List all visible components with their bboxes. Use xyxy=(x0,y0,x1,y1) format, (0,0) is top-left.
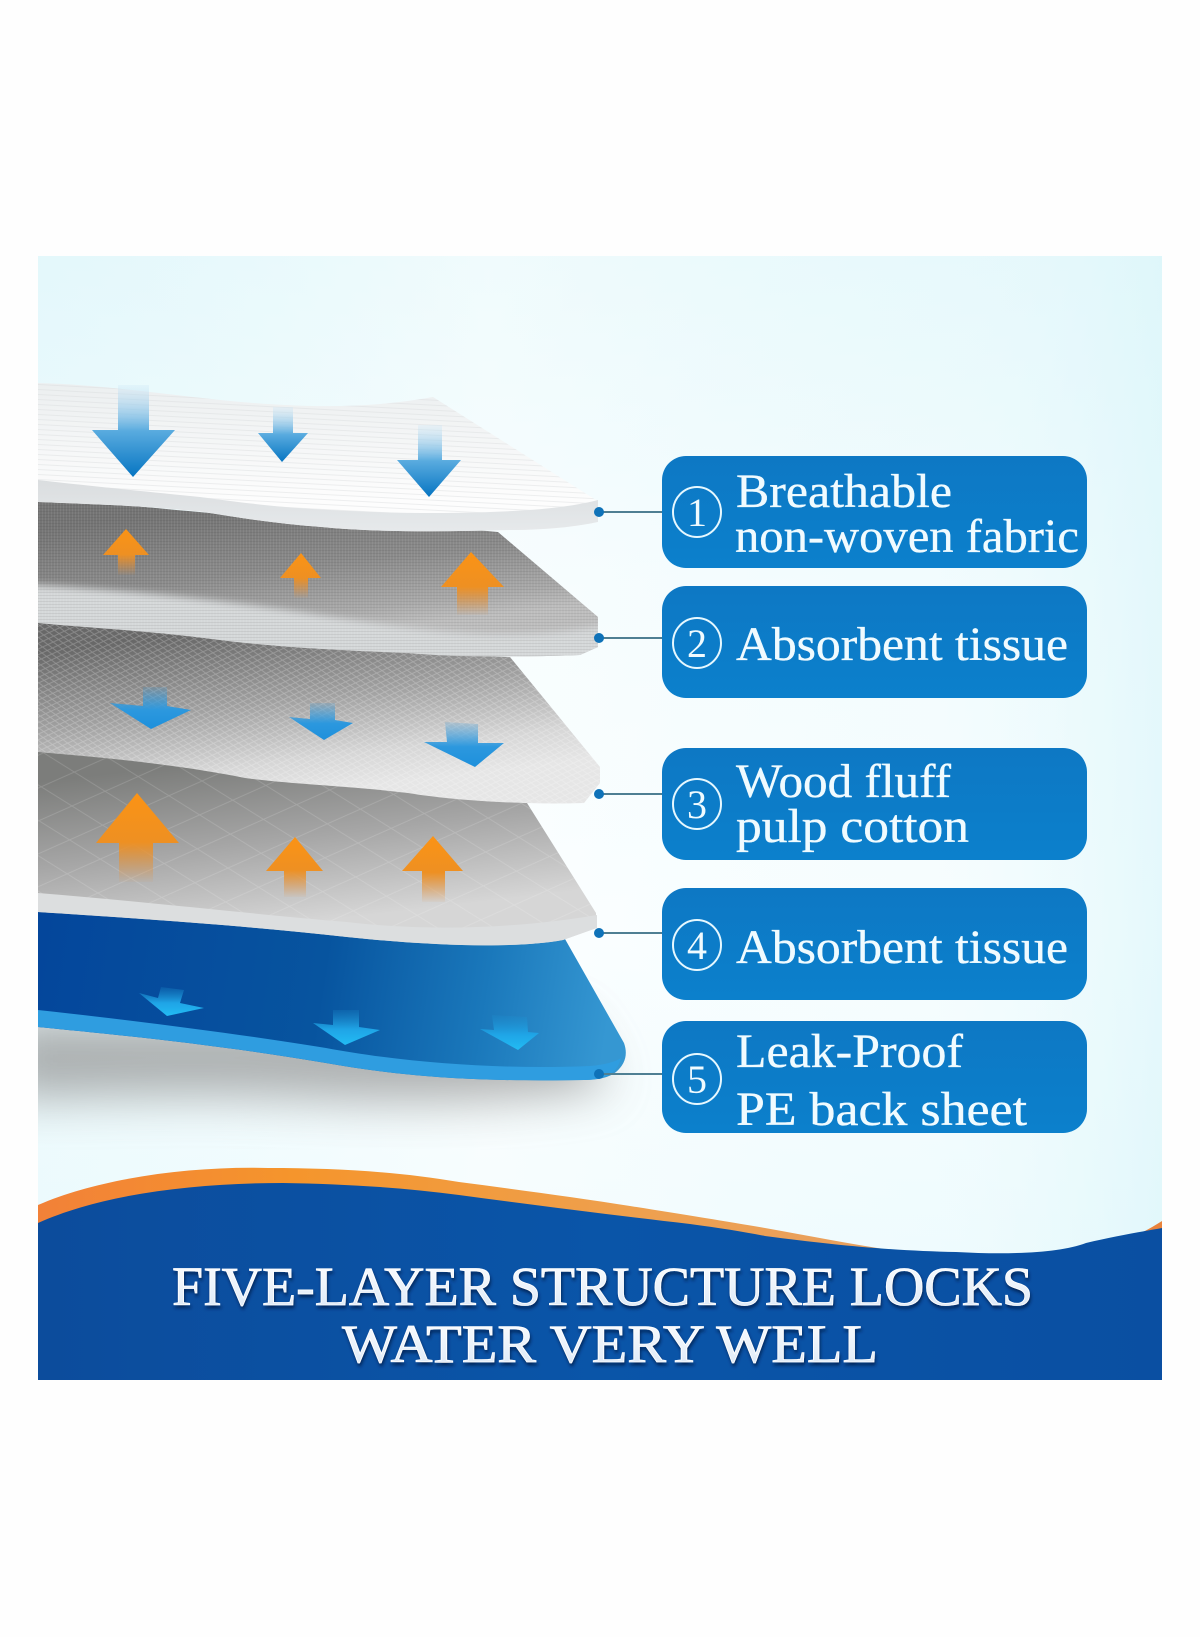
callout 2: absorbent tissue xyxy=(662,586,1087,698)
layer 1: breathable non-woven fabric xyxy=(38,383,598,531)
callout 5: leak-proof PE back sheet: PE back sheet xyxy=(736,1083,1028,1136)
arrow: orange up 2-2 xyxy=(280,553,321,598)
callout 1: breathable non-woven fabric: non-woven fabric xyxy=(735,510,1079,563)
arrow: blue down 1-2 xyxy=(258,407,308,462)
arrow: blue down 3-3 xyxy=(424,722,504,767)
callout 4: absorbent tissue xyxy=(662,888,1087,1000)
arrow: orange up 2-3 xyxy=(441,552,504,615)
arrow: orange up 4-3 xyxy=(402,836,463,902)
callout 3: wood fluff pulp cotton: pulp cotton xyxy=(736,800,969,853)
heading: FIVE-LAYER STRUCTURE LOCKS xyxy=(172,1256,1033,1317)
callout 1: breathable non-woven fabric: 1 xyxy=(687,490,707,535)
heading: WATER VERY WELL xyxy=(342,1314,878,1374)
arrow: blue down 5-3 xyxy=(480,1015,539,1050)
callout 3: wood fluff pulp cotton: 3 xyxy=(687,782,707,827)
callout 4: absorbent tissue: Absorbent tissue xyxy=(736,921,1068,974)
callout 1: breathable non-woven fabric xyxy=(662,456,1087,568)
panel: light blue background xyxy=(38,256,1162,1380)
callout connectors xyxy=(594,507,664,1079)
callout 3: wood fluff pulp cotton xyxy=(662,748,1087,860)
arrow: blue down 5-1 xyxy=(139,987,204,1016)
layer 2: absorbent tissue xyxy=(38,502,598,656)
arrow: orange up 2-1 xyxy=(103,529,149,575)
arrow: blue down 5-2 xyxy=(313,1010,380,1045)
layer 5: leak-proof PE back sheet xyxy=(38,905,626,1080)
layer 4: absorbent tissue xyxy=(38,745,597,945)
callout 5: leak-proof PE back sheet: Leak-Proof xyxy=(736,1025,963,1078)
heading xyxy=(172,1256,1033,1374)
arrow: blue down 3-1 xyxy=(110,687,191,729)
callout 1: breathable non-woven fabric: Breathable xyxy=(736,465,952,518)
callout 2: absorbent tissue: Absorbent tissue xyxy=(736,618,1068,671)
arrow: blue down 1-3 xyxy=(397,425,461,497)
callout 5: leak-proof PE back sheet: 5 xyxy=(687,1057,707,1102)
arrow: blue down 3-2 xyxy=(289,703,353,740)
arrow: blue down 1-1 xyxy=(92,385,175,477)
blue wave footer xyxy=(38,1183,1162,1380)
callout 5: leak-proof PE back sheet xyxy=(662,1021,1087,1136)
callout 3: wood fluff pulp cotton: Wood fluff xyxy=(736,755,951,808)
callout 4: absorbent tissue: 4 xyxy=(687,923,707,968)
infographic canvas xyxy=(38,256,1162,1380)
arrow: orange up 4-2 xyxy=(266,837,323,897)
bottom sheet shadow xyxy=(0,1020,610,1101)
layer 3: wood fluff pulp cotton xyxy=(38,616,600,803)
orange wave stripe xyxy=(38,1168,1162,1270)
callout 2: absorbent tissue: 2 xyxy=(687,621,707,666)
arrow: orange up 4-1 xyxy=(96,793,179,882)
